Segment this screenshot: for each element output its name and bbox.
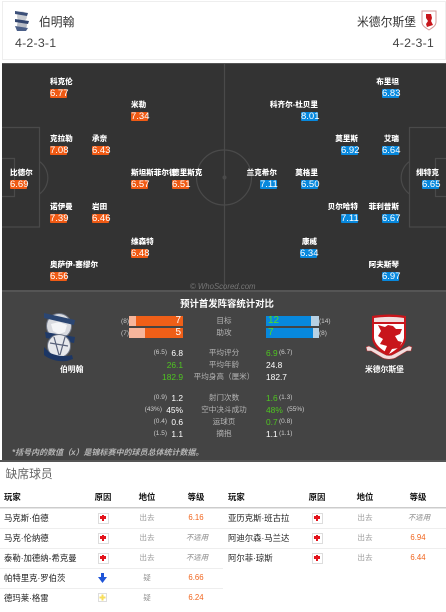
player: 米勒: [131, 100, 150, 122]
stat row: average rating: 6.9: [266, 348, 278, 358]
table row: 马克斯·伯德: 6.16: [188, 513, 204, 522]
table row: 泰勒·加德纳-希克曼: [0, 552, 446, 564]
table row: 阿迪尔森·马兰达: 出去: [357, 533, 373, 542]
away assists bar: 7: [268, 327, 274, 338]
label: assists: 助攻: [216, 328, 232, 337]
player: 兰克希尔: 兰克希尔: [247, 168, 277, 177]
player: 康威: 康威: [302, 237, 317, 246]
home goals bar: 7: [175, 315, 181, 326]
stat row: average age: 26.1: [167, 360, 183, 370]
header: status: 地位: [357, 492, 373, 502]
table row: 帕特里克·罗伯茨: 6.66: [188, 573, 204, 582]
player: 岩田: 6.46: [92, 213, 110, 224]
crest label: 伯明翰: 伯明翰: [60, 365, 83, 374]
header: player: 玩家: [228, 492, 245, 502]
player: 绯特克: 6.65: [422, 179, 440, 190]
bars: assists: [121, 327, 327, 338]
table row: 德玛莱·格雷: 6.24: [188, 593, 204, 602]
player: 艾瑞: 艾瑞: [384, 134, 399, 143]
player: 莫里斯: 6.92: [341, 145, 360, 156]
table row: 帕特里克·罗伯茨: [0, 572, 446, 584]
table row: 亚历克斯·班古拉: 不适用: [408, 513, 430, 522]
pitch markings: [2, 64, 446, 290]
home assists bar: [129, 328, 183, 338]
header: rating: 等级: [188, 492, 204, 502]
player: 绯特克: [416, 168, 440, 190]
player: 德里斯克: 6.51: [172, 179, 190, 190]
player: 诺伊曼: [50, 202, 73, 224]
player: 比德尔: [10, 168, 33, 190]
player: 维森特: 6.48: [131, 248, 150, 259]
stat row: average rating: 6.8: [171, 348, 183, 358]
table row: 阿尔菲·琼斯: 6.44: [410, 553, 426, 562]
comparison title: 预计首发阵容统计对比: [180, 298, 274, 309]
table header: home: [4, 492, 204, 502]
stat row: aerials won: 空中决斗成功: [201, 405, 247, 414]
table row: 德玛莱·格雷: [0, 592, 446, 604]
player: 贝尔哈特: 7.11: [341, 213, 359, 224]
player: 贝尔哈特: [328, 202, 359, 224]
stat row: shots: [154, 393, 292, 403]
player: 阿夫斯琴: 6.97: [382, 271, 400, 282]
stat row: dribbles: (0.8): [279, 418, 292, 425]
player: 诺伊曼: 7.39: [50, 213, 68, 224]
player: 克拉勒: 7.08: [50, 145, 68, 156]
table row: 泰勒·加德纳-希克曼: 出去: [139, 553, 155, 562]
player: 布里坦: 6.83: [382, 88, 400, 99]
player: 岩田: 岩田: [92, 202, 107, 211]
label: goals: 目标: [216, 316, 232, 325]
table row: 亚历克斯·班古拉: 出去: [357, 513, 373, 522]
player: 米勒: 7.34: [131, 111, 150, 122]
home assists bar: 5: [175, 327, 181, 338]
table row: 马克斯·伯德: 出去: [139, 513, 155, 522]
player: 科克伦: 科克伦: [50, 77, 73, 86]
player: 斯坦斯菲尔德: 6.57: [131, 179, 150, 190]
away team name: 米德尔斯堡: [357, 15, 416, 29]
table row: 马克·伦纳德: 出去: [139, 533, 155, 542]
player: 莫格里: [295, 168, 320, 190]
player: 布里坦: [376, 77, 400, 99]
player: 比德尔: 6.69: [10, 179, 28, 190]
stat row: average rating: 平均评分: [209, 348, 239, 357]
player: 米勒: 米勒: [131, 100, 146, 109]
stat row: average rating: (6.7): [279, 349, 292, 356]
player: 莫格里: 6.50: [301, 179, 320, 190]
player: 科齐尔-杜贝里: [270, 100, 320, 122]
table row: 马克·伦纳德: [0, 532, 446, 544]
footnote: *括号内的数值（x）是锦标赛中的球员总体统计数据。: [12, 448, 204, 457]
stat row: tackles: 1.1: [266, 429, 278, 439]
table rules: [0, 507, 446, 589]
icon: Middlesbrough crest small: [422, 10, 436, 30]
crest label: 米德尔斯堡: 米德尔斯堡: [365, 365, 404, 374]
player: 岩田: [92, 202, 110, 224]
away goals bar: 12: [268, 315, 279, 326]
table row: 阿尔菲·琼斯: [0, 552, 446, 564]
player: 维森特: 维森特: [131, 237, 154, 246]
home goals bar: [129, 316, 183, 326]
stat row: average height: 182.7: [266, 372, 287, 382]
header: reason: 原因: [309, 492, 325, 502]
away goals bar: [266, 316, 319, 326]
table row: 帕特里克·罗伯茨: 疑: [143, 573, 151, 582]
stat row: average rating: (6.5): [154, 349, 167, 356]
player: 德里斯克: [172, 168, 202, 190]
player: 比德尔: 比德尔: [10, 168, 33, 177]
player: 科齐尔-杜贝里: 8.01: [301, 111, 320, 122]
player: 维森特: [131, 237, 154, 259]
player: 菲利普斯: 6.67: [382, 213, 400, 224]
stat row: average height: [162, 372, 287, 382]
stat row: shots: (1.3): [279, 394, 292, 401]
header: status: 地位: [139, 492, 155, 502]
stat row: average age: 24.8: [266, 360, 282, 370]
table row: 泰勒·加德纳-希克曼: 不适用: [186, 553, 208, 562]
stat row: shots: 1.6: [266, 393, 278, 403]
player: 莫格里: 莫格里: [295, 168, 318, 177]
player: 绯特克: 绯特克: [416, 168, 439, 177]
table header: away: [228, 492, 426, 502]
panel: pitch: [2, 63, 446, 292]
player: 克拉勒: [50, 134, 73, 156]
stat row: tackles: (1.1): [279, 430, 292, 437]
player: 艾瑞: [382, 134, 400, 156]
home assists total: (7): [121, 330, 129, 337]
player: 菲利普斯: [368, 202, 400, 224]
crest: Birmingham: [44, 313, 75, 362]
stat row: tackles: [154, 429, 292, 439]
stat row: tackles: (1.5): [154, 430, 167, 437]
header: rating: 等级: [410, 492, 426, 502]
player: 康威: [300, 237, 318, 259]
away goals total: (14): [319, 318, 331, 325]
stat row: tackles: 摘抱: [216, 429, 232, 438]
table row: 阿尔菲·琼斯: 阿尔菲·琼斯: [228, 553, 273, 563]
header: teams: [2, 1, 446, 60]
table row: 德玛莱·格雷: 德玛莱·格雷: [4, 593, 49, 603]
away assists total: (8): [319, 330, 327, 337]
stat row: average age: [167, 360, 282, 370]
stat row: dribbles: (0.4): [154, 418, 167, 425]
table row: 泰勒·加德纳-希克曼: 泰勒·加德纳-希克曼: [4, 553, 77, 563]
stat row: aerials won: (55%): [287, 406, 304, 413]
stat row: dribbles: [154, 417, 292, 427]
icon: Birmingham crest small: [15, 11, 29, 31]
divider band: [0, 460, 446, 462]
header: player: 玩家: [4, 492, 21, 502]
stat row: dribbles: 运球页: [213, 417, 235, 426]
player: 康威: 6.34: [300, 248, 318, 259]
player: 兰克希尔: 7.11: [260, 179, 278, 190]
player: 阿夫斯琴: 阿夫斯琴: [369, 260, 399, 269]
table row: 马克斯·伯德: [4, 513, 204, 524]
table row: 阿迪尔森·马兰达: 6.94: [410, 533, 426, 542]
crest: Middlesbrough: [366, 314, 412, 360]
table row: 德玛莱·格雷: 疑: [143, 593, 151, 602]
table row: 阿尔菲·琼斯: 出去: [357, 553, 373, 562]
stat row: aerials won: 48%: [266, 405, 283, 415]
table row: 亚历克斯·班古拉: [0, 512, 446, 524]
player: 克拉勒: 克拉勒: [50, 134, 73, 143]
stat row: shots: (0.9): [154, 394, 167, 401]
player: 兰克希尔: [246, 168, 278, 190]
away formation: 4-2-3-1: [393, 36, 434, 50]
stat row: shots: 射门次数: [209, 393, 239, 402]
player: 承奈: 承奈: [92, 134, 107, 143]
stat row: average age: 平均年龄: [209, 360, 239, 369]
stat row: dribbles: 0.6: [171, 417, 183, 427]
player: 德里斯克: 德里斯克: [172, 168, 202, 177]
stat row: dribbles: 0.7: [266, 417, 278, 427]
watermark: © WhoScored.com: [190, 282, 256, 291]
stat row: average height: 平均身高（厘米）: [194, 372, 254, 381]
home team name: 伯明翰: [39, 15, 74, 29]
stat row: aerials won: 45%: [166, 405, 183, 415]
player: 斯坦斯菲尔德: 斯坦斯菲尔德: [131, 168, 177, 177]
player: 阿夫斯琴: [369, 260, 400, 282]
table row: 阿迪尔森·马兰达: [0, 532, 446, 544]
panel: starting lineup comparison: [2, 292, 446, 460]
home goals total: (8): [121, 318, 129, 325]
player: 奥萨伊-塞缪尔: 6.56: [50, 271, 68, 282]
table row: 帕特里克·罗伯茨: 帕特里克·罗伯茨: [4, 573, 65, 583]
stat row: average height: 182.9: [162, 372, 183, 382]
player: 艾瑞: 6.64: [382, 145, 400, 156]
player: 诺伊曼: 诺伊曼: [50, 202, 73, 211]
player: 奥萨伊-塞缪尔: 奥萨伊-塞缪尔: [50, 260, 98, 269]
stat row: aerials won: [145, 405, 304, 415]
player: 菲利普斯: 菲利普斯: [369, 202, 399, 211]
table row: 阿迪尔森·马兰达: 阿迪尔森·马兰达: [228, 533, 289, 543]
header: reason: 原因: [95, 492, 111, 502]
player: 科克伦: [50, 77, 73, 99]
table row: 马克斯·伯德: 马克斯·伯德: [4, 513, 49, 523]
player: 贝尔哈特: 贝尔哈特: [328, 202, 358, 211]
table row: 亚历克斯·班古拉: 亚历克斯·班古拉: [228, 513, 289, 523]
bars: goals: [121, 315, 331, 326]
stat row: tackles: 1.1: [171, 429, 183, 439]
table row: 马克·伦纳德: 马克·伦纳德: [4, 533, 49, 543]
home formation: 4-2-3-1: [15, 36, 56, 50]
player: 莫里斯: 莫里斯: [335, 134, 358, 143]
player: 斯坦斯菲尔德: [131, 168, 177, 190]
away assists bar: [266, 328, 319, 338]
stat row: average rating: [154, 348, 292, 358]
player: 承奈: 6.43: [92, 145, 110, 156]
player: 布里坦: 布里坦: [376, 77, 399, 86]
player: 莫里斯: [335, 134, 360, 156]
player: 科克伦: 6.77: [50, 88, 68, 99]
heading: missing players: 缺席球员: [6, 467, 53, 481]
player: 承奈: [92, 134, 110, 156]
stat row: shots: 1.2: [171, 393, 183, 403]
stat row: aerials won: (43%): [145, 406, 162, 413]
table row: 马克·伦纳德: 不适用: [186, 533, 208, 542]
player: 奥萨伊-塞缪尔: [50, 260, 98, 282]
player: 科齐尔-杜贝里: 科齐尔-杜贝里: [270, 100, 318, 109]
